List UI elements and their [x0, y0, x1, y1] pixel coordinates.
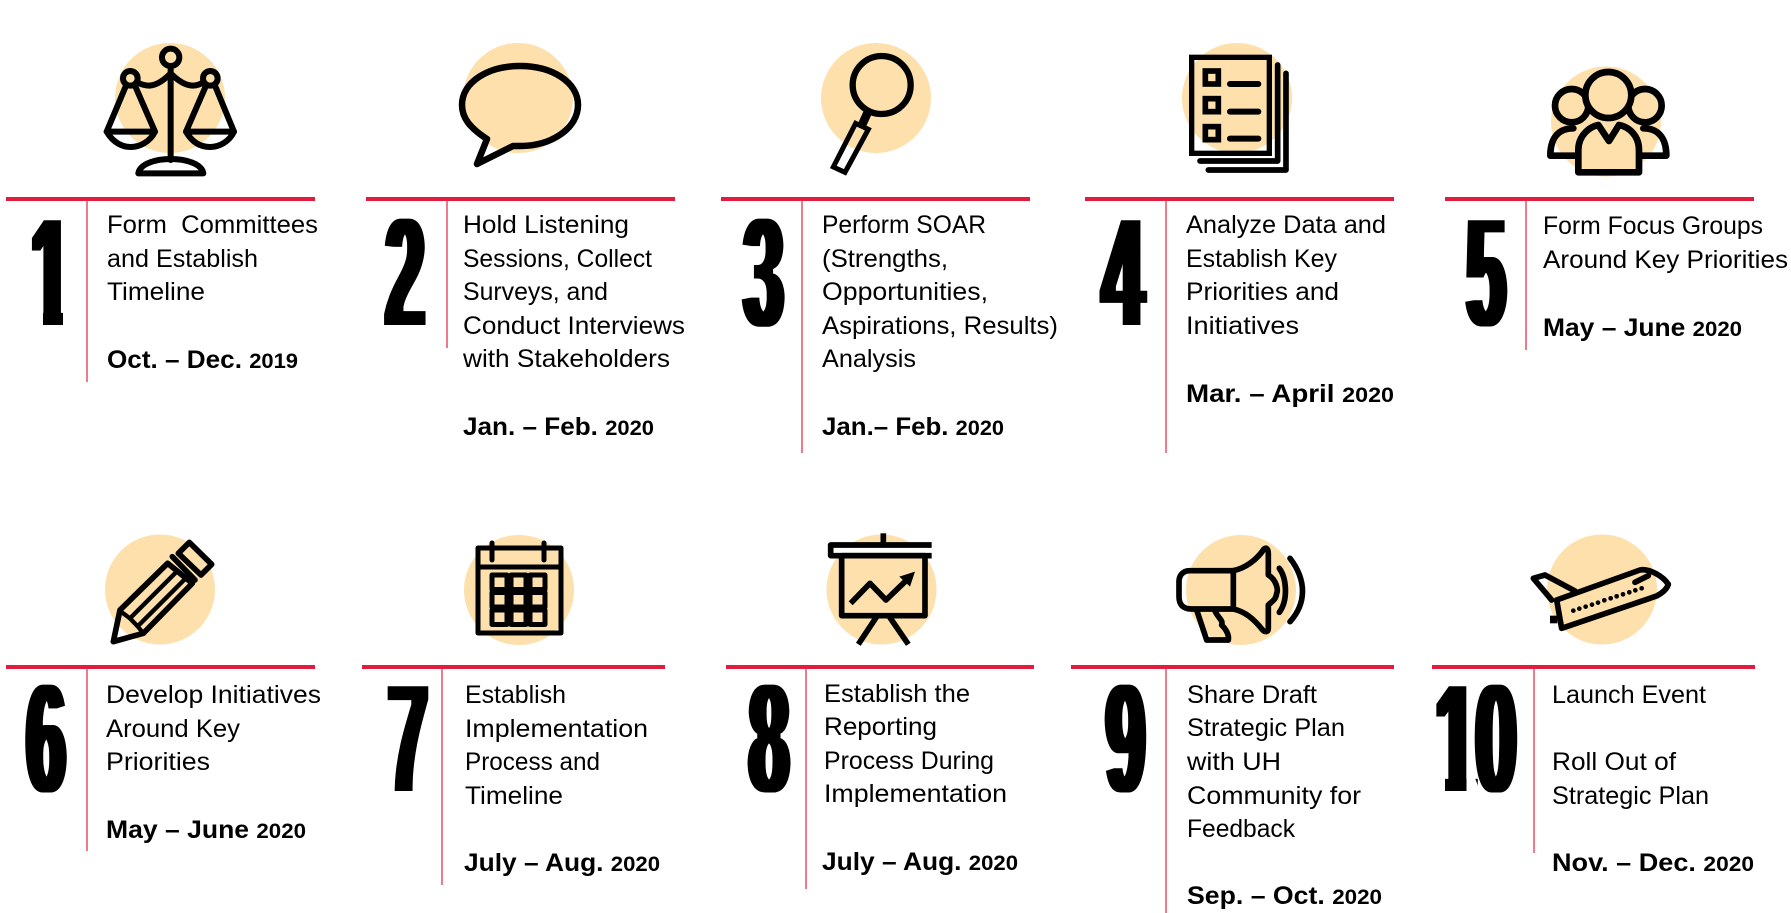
text: step 9 description and date: Sep. – Oct. 2020 — [1187, 882, 1382, 910]
text: step 9 description and date — [1186, 681, 1382, 910]
icon: group of people — [1550, 66, 1666, 176]
panel: step 5 focus groups — [1445, 66, 1788, 361]
text: step 8 description and date: July – Aug. 2020 — [822, 848, 1018, 876]
text: step 10 description and date: Nov. – Dec. 2020 — [1552, 849, 1754, 877]
text: step 6 description and date: Develop Initiatives — [106, 681, 321, 709]
icon: calendar — [464, 535, 574, 645]
text: step 4 description and date: Analyze Data and — [1186, 211, 1386, 239]
panel: step 2 listening sessions — [366, 43, 685, 441]
text: step 2 description and date: with Stakeholders — [462, 345, 670, 373]
number 6: 6 — [27, 651, 65, 827]
text: step 8 description and date: Process During — [824, 747, 994, 775]
text: step 10 description and date: Strategic Plan — [1552, 782, 1709, 810]
text: step 3 description and date: Opportunities, — [822, 278, 988, 306]
text: step 2 description and date: Sessions, Collect — [463, 245, 652, 273]
text: step 10 description and date: Launch Event — [1552, 681, 1706, 709]
text: step 5 description and date — [1543, 212, 1788, 342]
text: step 7 description and date — [464, 681, 660, 877]
text: step 7 description and date: Timeline — [465, 782, 563, 810]
text: step 2 description and date: Jan. – Feb. 2020 — [463, 413, 654, 441]
text: step 2 description and date: Conduct Interviews — [463, 312, 685, 340]
icon: presentation board with chart — [826, 533, 936, 644]
text: step 6 description and date: May – June 2020 — [106, 816, 306, 844]
panel: step 9 share draft — [1071, 535, 1394, 913]
panel: step 1 form committees — [6, 43, 318, 382]
number 2: 2 — [386, 185, 424, 361]
text: step 4 description and date — [1186, 211, 1394, 408]
number 4: 4 — [1102, 185, 1144, 362]
text: step 6 description and date: Around Key — [106, 715, 241, 743]
icon: balance scales — [107, 43, 234, 173]
text: step 7 description and date: July – Aug. 2020 — [464, 849, 660, 877]
panel: step 8 reporting process — [726, 533, 1034, 889]
text: step 5 description and date: Around Key Priorities — [1543, 246, 1788, 274]
number 10: 10 — [1435, 652, 1516, 828]
text: step 6 description and date — [106, 681, 321, 844]
number 7: 7 — [389, 651, 427, 827]
number 3: 3 — [744, 184, 783, 361]
text: step 4 description and date: Mar. – April 2020 — [1186, 380, 1394, 408]
icon: speech bubble — [462, 43, 578, 164]
text: step 1 description and date: Timeline — [107, 278, 205, 306]
text: step 3 description and date: Jan.– Feb. 2020 — [822, 413, 1004, 441]
text: step 5 description and date: Form Focus Groups — [1543, 212, 1763, 240]
text: step 9 description and date: Share Draft — [1187, 681, 1317, 709]
text: step 10 description and date — [1552, 681, 1754, 877]
text: step 9 description and date: Strategic Plan — [1187, 714, 1345, 742]
number 8: 8 — [749, 650, 789, 827]
panel: step 7 implementation process — [362, 535, 665, 885]
text: step 10 description and date: Roll Out of — [1552, 748, 1676, 776]
text: step 1 description and date: Form Committees — [107, 211, 318, 239]
text: step 7 description and date: Establish — [465, 681, 566, 709]
text: step 9 description and date: Feedback — [1187, 815, 1295, 843]
panel: step 6 develop initiatives — [6, 534, 321, 851]
text: step 5 description and date: May – June 2020 — [1543, 314, 1742, 342]
text: step 7 description and date: Process and — [465, 748, 600, 776]
icon: pencil — [105, 534, 215, 644]
text: step 6 description and date: Priorities — [106, 748, 210, 776]
text: step 2 description and date: Surveys, and — [463, 278, 608, 306]
icon: megaphone — [1179, 535, 1302, 645]
number 1: 1 — [31, 185, 70, 361]
text: step 8 description and date: Reporting — [824, 713, 937, 741]
text: step 7 description and date: Implementation — [465, 715, 648, 743]
text: step 2 description and date: Hold Listening — [463, 211, 629, 239]
icon: space shuttle — [1533, 534, 1668, 644]
text: step 3 description and date: (Strengths, — [822, 245, 948, 273]
text: step 8 description and date — [822, 680, 1018, 876]
text: step 8 description and date: Establish the — [824, 680, 970, 708]
text: step 3 description and date: Aspirations, Results) — [822, 312, 1058, 340]
text: step 1 description and date — [107, 211, 318, 374]
text: step 3 description and date — [822, 211, 1058, 441]
text: step 8 description and date: Implementation — [824, 780, 1007, 808]
text: step 3 description and date: Perform SOAR — [822, 211, 986, 239]
panel: step 4 analyze data — [1085, 43, 1394, 453]
text: step 9 description and date: with UH — [1186, 748, 1281, 776]
icon: stacked checklist — [1182, 43, 1292, 170]
text: step 1 description and date: and Establish — [107, 245, 258, 273]
text: step 2 description and date — [462, 211, 685, 441]
number 5: 5 — [1467, 185, 1505, 361]
icon: magnifying glass — [821, 43, 931, 172]
text: step 4 description and date: Initiatives — [1186, 312, 1299, 340]
panel: step 3 SOAR analysis — [721, 43, 1058, 453]
text: step 3 description and date: Analysis — [822, 345, 916, 373]
text: step 9 description and date: Community for — [1187, 782, 1361, 810]
text: step 4 description and date: Establish Key — [1186, 245, 1337, 273]
number 9: 9 — [1106, 651, 1145, 827]
text: step 1 description and date: Oct. – Dec. 2019 — [107, 346, 298, 374]
panel: step 10 launch event — [1426, 534, 1755, 877]
text: step 4 description and date: Priorities and — [1186, 278, 1339, 306]
